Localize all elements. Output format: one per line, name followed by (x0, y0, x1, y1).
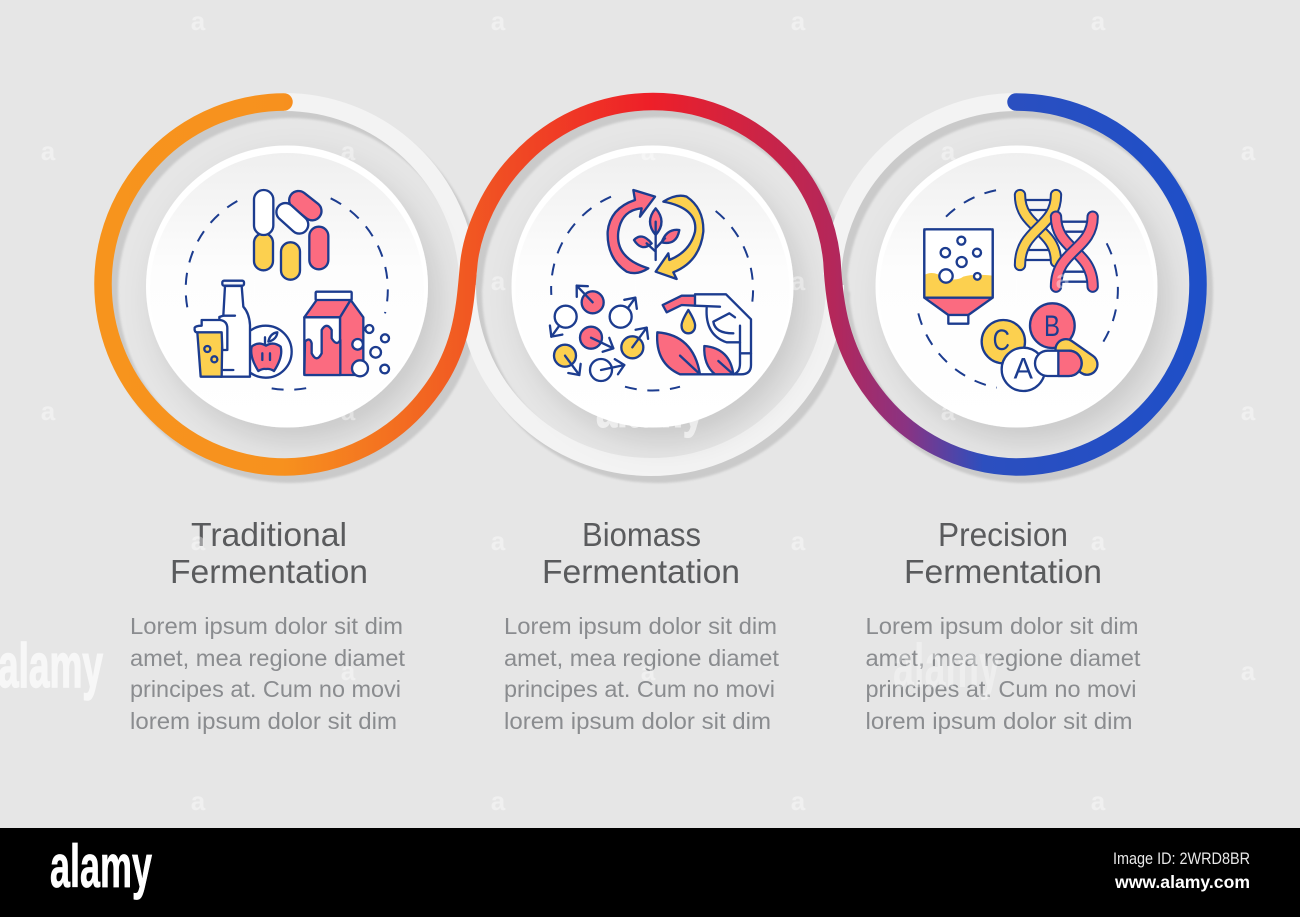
column: precision fermentation (866, 516, 1141, 734)
body text: principes at. Cum no movi (504, 676, 775, 702)
dashed circle (551, 197, 753, 390)
watermark letters: a (341, 396, 356, 426)
vitamins (982, 303, 1102, 391)
watermark letters: a (1056, 264, 1071, 294)
dashed circle (186, 198, 388, 390)
disk: traditional (146, 146, 428, 428)
body text: Lorem ipsum dolor sit dim (504, 613, 777, 639)
bacteria pills (254, 187, 328, 280)
heading: Precision (938, 516, 1068, 553)
column: traditional fermentation (130, 516, 405, 734)
watermark logo: centre: alamy (596, 382, 704, 438)
footer bar (0, 828, 1300, 917)
watermark letters: a (491, 6, 506, 36)
watermark logo: right: alamy (893, 632, 1000, 701)
icon: biomass fermentation (551, 190, 753, 390)
watermark letters: a (491, 786, 506, 816)
watermark logo: left: alamy (0, 632, 103, 701)
DNA yellow (1020, 195, 1056, 265)
body text: amet, mea regione diamet (504, 645, 779, 671)
watermark letters: a (41, 136, 56, 166)
light ring segments (284, 102, 1016, 467)
watermark letters: a (641, 136, 656, 166)
dashed circle (918, 189, 1118, 388)
vitamins: C (993, 324, 1010, 357)
plant (634, 208, 679, 260)
disk: precision (876, 146, 1158, 428)
recycle arrows (608, 190, 703, 279)
watermark letters: a (1091, 526, 1106, 556)
body text: amet, mea regione diamet (130, 645, 405, 671)
body text: principes at. Cum no movi (866, 676, 1136, 702)
watermark letters: a (641, 656, 656, 686)
body text: lorem ipsum dolor sit dim (130, 708, 397, 734)
heading: Fermentation (170, 553, 368, 590)
vitamins: B (1044, 310, 1060, 343)
apple (240, 326, 292, 378)
icon: traditional fermentation (186, 187, 389, 390)
watermark letters: a (791, 786, 806, 816)
column: biomass fermentation (504, 516, 779, 734)
watermark letters: a (791, 266, 806, 296)
icon: precision fermentation (918, 189, 1118, 391)
body text: Lorem ipsum dolor sit dim (866, 613, 1138, 639)
gradient ribbon (103, 102, 1198, 467)
website: www.alamy.com (1114, 872, 1250, 892)
footer logo: alamy (50, 833, 152, 900)
watermark letters: a (341, 136, 356, 166)
body text: lorem ipsum dolor sit dim (866, 708, 1132, 734)
watermark letters: a (791, 6, 806, 36)
watermark letters: a (941, 136, 956, 166)
watermark letters: a (191, 526, 206, 556)
watermark letters: a (191, 6, 206, 36)
body text: lorem ipsum dolor sit dim (504, 708, 771, 734)
watermark letters: a (1091, 6, 1106, 36)
milk carton (304, 292, 363, 375)
molecules (551, 286, 647, 381)
image id: Image ID: 2WRD8BR (1113, 849, 1250, 868)
body text: Lorem ipsum dolor sit dim (130, 613, 403, 639)
bottle (219, 281, 250, 377)
bubbles (352, 325, 389, 376)
watermark letters: a (1091, 786, 1106, 816)
disk: biomass (512, 146, 794, 428)
watermark letters: a (491, 526, 506, 556)
ring shadows (109, 109, 1204, 474)
bioreactor tank (924, 229, 993, 324)
vitamins: A (1014, 352, 1033, 385)
body text: amet, mea regione diamet (866, 645, 1141, 671)
watermark letters: a (1241, 136, 1256, 166)
watermark letters: a (41, 396, 56, 426)
watermark letters: a (191, 786, 206, 816)
heading: Fermentation (542, 553, 740, 590)
heading: Fermentation (904, 553, 1102, 590)
beer glass (195, 320, 227, 377)
watermark letters: a (491, 266, 506, 296)
watermark letters: a (1241, 656, 1256, 686)
watermark letters: a (341, 656, 356, 686)
fuel canister (657, 294, 751, 374)
watermark letters: a (941, 396, 956, 426)
watermark letters: a (1241, 396, 1256, 426)
heading: Biomass (582, 516, 701, 553)
heading: Traditional (191, 516, 347, 553)
body text: principes at. Cum no movi (130, 676, 401, 702)
watermark letters: a (791, 526, 806, 556)
DNA pink (1056, 217, 1093, 287)
